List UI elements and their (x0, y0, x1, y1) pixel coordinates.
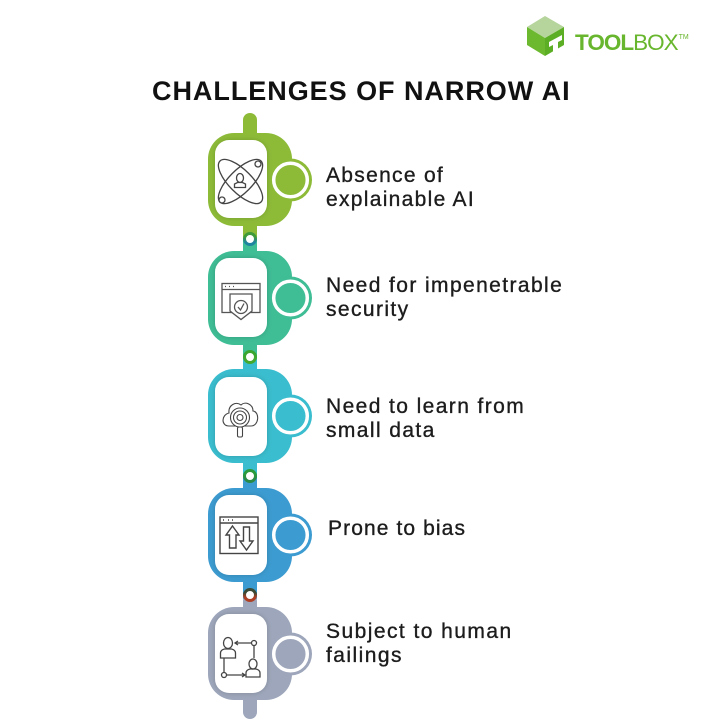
connector dots (244, 234, 256, 600)
step 3 shape (208, 356, 312, 480)
step 5 shape (208, 594, 312, 719)
label: need for impenetrable security: security (326, 298, 410, 321)
label: prone to bias: Prone to bias (328, 517, 466, 540)
label: absence of explainable AI: explainable AI (326, 188, 475, 211)
label: subject to human failings: failings (326, 644, 403, 667)
label: absence of explainable AI: Absence of (326, 164, 444, 187)
step 4 shape (208, 475, 312, 599)
label: need to learn from small data: small data (326, 419, 436, 442)
icon: browser with shield (222, 284, 260, 320)
icon: cloud with magnifier (223, 403, 258, 437)
icon: browser with up and down arrows (220, 517, 258, 554)
label: subject to human failings: Subject to human (326, 620, 513, 643)
label: need for impenetrable security (326, 274, 563, 321)
logo: Toolbox: TOOLBOXTM (575, 30, 689, 55)
label: subject to human failings (326, 620, 513, 667)
icon: atom with person (212, 153, 269, 210)
title: CHALLENGES OF NARROW AI (152, 76, 571, 106)
label: need to learn from small data (326, 395, 525, 442)
logo: Toolbox (527, 16, 689, 56)
icon: people in a cycle (220, 638, 260, 678)
label: absence of explainable AI (326, 164, 475, 211)
step 1 shape (208, 113, 312, 243)
label: need for impenetrable security: Need for impenetrable (326, 274, 563, 297)
step 2 shape (208, 238, 312, 361)
label: need to learn from small data: Need to learn from (326, 395, 525, 418)
